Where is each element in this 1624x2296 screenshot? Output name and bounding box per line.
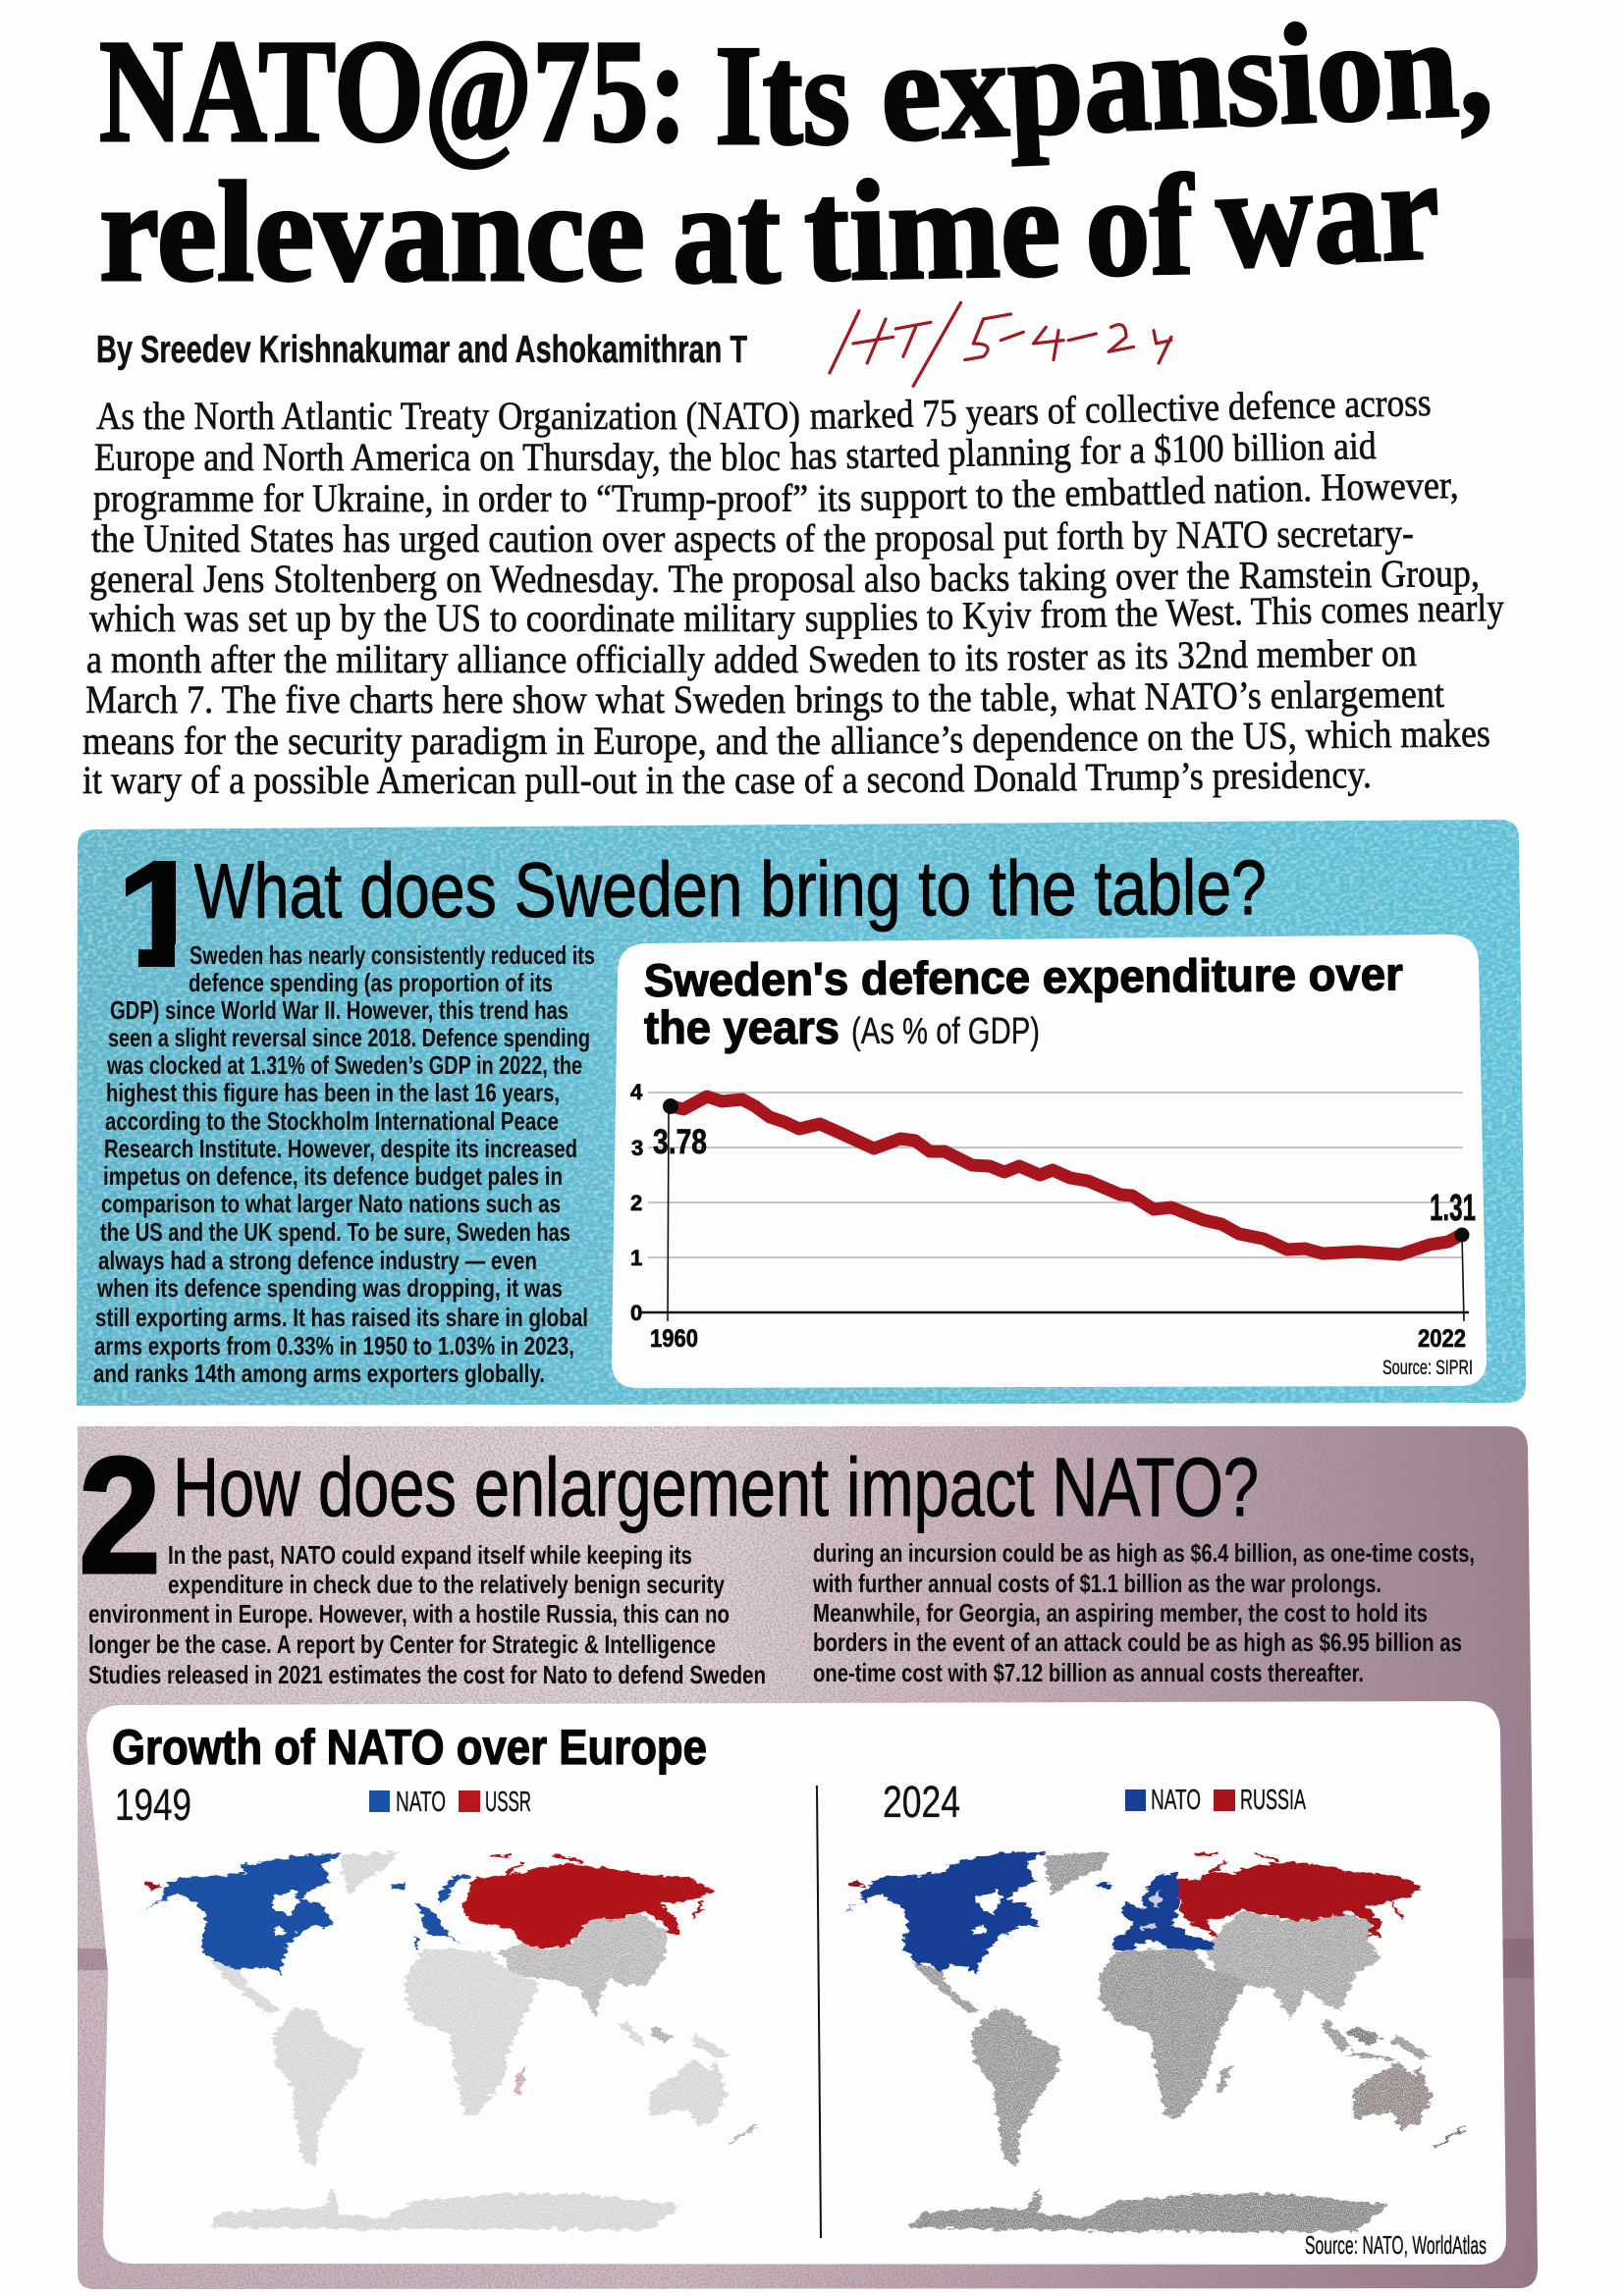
body text: impetus on defence, its defence budget pales in bbox=[103, 1161, 563, 1191]
title: time bbox=[803, 147, 1062, 311]
body text: left column bbox=[88, 1540, 766, 1689]
body text: was clocked at 1.31% of Sweden’s GDP in 2022, the bbox=[106, 1050, 582, 1080]
body text: left column: environment in Europe. However, with a hostile Russia, this can no bbox=[88, 1599, 730, 1629]
world map 2024 bbox=[840, 1851, 1466, 2232]
chart card: Sweden's defence expenditure bbox=[612, 934, 1487, 1388]
chart title: the years bbox=[644, 1001, 839, 1053]
title bbox=[99, 0, 1495, 313]
title: relevance bbox=[99, 152, 645, 311]
intro text block: Sweden to its roster as its 32nd member on bbox=[808, 630, 1417, 681]
body text: and ranks 14th among arms exporters globally. bbox=[93, 1359, 545, 1388]
intro text block: which was set up by the US to coordinate military bbox=[89, 596, 795, 640]
body text: right column: one-time cost with $7.12 billion as annual costs thereafter. bbox=[813, 1658, 1364, 1687]
title: Its bbox=[715, 16, 850, 175]
line chart: 3.78 bbox=[653, 1123, 707, 1161]
body text: highest this figure has been in the last 16 years, bbox=[106, 1078, 560, 1107]
intro text block: Europe and North America on Thursday, the bloc bbox=[94, 435, 781, 479]
chart title: Sweden's defence expenditure over bbox=[644, 947, 1403, 1006]
legend 1949 bbox=[369, 1787, 531, 1818]
body text: comparison to what larger Nato nations such as bbox=[101, 1189, 561, 1218]
legend 2024 bbox=[1125, 1785, 1306, 1816]
intro text block: marked 75 years of collective defence across bbox=[809, 380, 1432, 438]
body text: left column: expenditure in check due to the relatively benign security bbox=[168, 1570, 725, 1599]
chart source: Source: SIPRI bbox=[1382, 1357, 1473, 1379]
legend 1949: NATO bbox=[396, 1787, 446, 1818]
intro text block: its support to the embattled nation. However, bbox=[817, 462, 1459, 520]
body text: the US and the UK spend. To be sure, Sweden has bbox=[100, 1217, 570, 1247]
body text bbox=[93, 940, 595, 1388]
line chart: 3 bbox=[631, 1136, 643, 1160]
body text: always had a strong defence industry — even bbox=[98, 1246, 537, 1275]
intro text block: the United States has urged caution over aspects of bbox=[91, 516, 816, 561]
intro text block: alliance’s dependence on the US, which makes bbox=[831, 711, 1490, 763]
year label 2024: 2024 bbox=[883, 1777, 960, 1827]
line chart: 0 bbox=[630, 1301, 642, 1325]
body text: left column: In the past, NATO could expand itself while keeping its bbox=[168, 1540, 692, 1570]
map card title: Growth of NATO over Europe bbox=[112, 1720, 707, 1775]
intro text block: has started planning for a $100 billion aid bbox=[789, 423, 1377, 478]
body text: left column: longer be the case. A report by Center for Strategic & Intelligence bbox=[88, 1629, 716, 1659]
map 1949 bbox=[115, 1780, 760, 2229]
line chart: 2022 bbox=[1418, 1325, 1466, 1353]
intro text block bbox=[82, 380, 1504, 802]
body text: arms exports from 0.33% in 1950 to 1.03% in 2023, bbox=[94, 1331, 574, 1361]
title: war bbox=[1213, 130, 1442, 298]
divider between maps bbox=[817, 1786, 821, 2238]
intro text block: also backs taking over the Ramstein Group, bbox=[864, 551, 1480, 601]
map 2024 bbox=[840, 1777, 1466, 2232]
year label 1949: 1949 bbox=[115, 1780, 191, 1830]
chart title: (As % of GDP) bbox=[851, 1011, 1040, 1052]
body text: left column: Studies released in 2021 estimates the cost for Nato to defend Sweden bbox=[88, 1660, 766, 1689]
intro text block: general Jens Stoltenberg on Wednesday. The proposal bbox=[89, 557, 855, 601]
chart title bbox=[644, 947, 1403, 1053]
body text: defence spending (as proportion of its bbox=[189, 968, 553, 997]
body text: right column: with further annual costs of $1.1 billion as the war prolongs. bbox=[812, 1569, 1381, 1598]
legend 2024: RUSSIA bbox=[1240, 1785, 1306, 1816]
body text: right column: borders in the event of an attack could be as high as $6.95 billion as bbox=[813, 1628, 1462, 1657]
title: NATO@75: bbox=[99, 10, 687, 173]
intro text block: March 7. The five charts here show what Sweden bbox=[85, 677, 785, 721]
section heading: How does enlargement impact NATO? bbox=[173, 1441, 1259, 1533]
intro text block: programme for Ukraine, in order to “Trump-proof” bbox=[93, 476, 808, 520]
section heading: What does Sweden bring to the table? bbox=[194, 843, 1267, 934]
body text: right column bbox=[812, 1538, 1475, 1687]
intro text block: the proposal put forth by NATO secretary- bbox=[824, 510, 1414, 561]
panel: how does enlargement impact NATO bbox=[69, 1414, 1551, 2296]
line chart: 1.31 bbox=[1430, 1188, 1476, 1229]
world map 1949 bbox=[139, 1851, 760, 2229]
intro text block: As the North Atlantic Treaty Organization (NATO) bbox=[96, 394, 800, 438]
map card: growth of NATO over Europe bbox=[86, 1701, 1506, 2265]
line chart bbox=[630, 1080, 1476, 1353]
intro text block: of a second Donald Trump’s presidency. bbox=[804, 752, 1372, 802]
title: of bbox=[1084, 145, 1197, 306]
legend 2024: NATO bbox=[1151, 1785, 1201, 1816]
handwritten note: HT/5-4-24 bbox=[830, 302, 1171, 386]
line chart: 1960 bbox=[650, 1325, 698, 1353]
map source: Source: NATO, WorldAtlas bbox=[1305, 2230, 1487, 2260]
title: at bbox=[673, 154, 781, 313]
body text: Sweden has nearly consistently reduced its bbox=[189, 940, 595, 970]
intro text block: a month after the military alliance officially added bbox=[86, 637, 798, 681]
line chart: 4 bbox=[630, 1080, 643, 1104]
line chart: 1 bbox=[630, 1246, 642, 1270]
body text: right column: Meanwhile, for Georgia, an aspiring member, the cost to hold its bbox=[813, 1598, 1428, 1628]
body text: GDP) since World War II. However, this trend has bbox=[110, 995, 568, 1025]
intro text block: it wary of a possible American pull-out in the case bbox=[82, 758, 795, 802]
intro text block: brings to the table, what NATO’s enlargement bbox=[795, 671, 1444, 721]
section number 1: 1 bbox=[116, 829, 204, 998]
legend 1949: USSR bbox=[485, 1787, 531, 1818]
byline: By Sreedev Krishnakumar and Ashokamithran T bbox=[96, 329, 747, 371]
section number 2: 2 bbox=[79, 1422, 161, 1608]
panel: what does Sweden bring to the table bbox=[69, 815, 1542, 1414]
body text: still exporting arms. It has raised its share in global bbox=[95, 1303, 588, 1332]
body text: when its defence spending was dropping, it was bbox=[96, 1273, 563, 1303]
body text: Research Institute. However, despite its increased bbox=[104, 1134, 577, 1163]
body text: according to the Stockholm International Peace bbox=[105, 1106, 559, 1136]
intro text block: supplies to Kyiv from the West. This comes nearly bbox=[804, 585, 1504, 640]
line chart: 2 bbox=[630, 1191, 642, 1215]
body text: seen a slight reversal since 2018. Defence spending bbox=[108, 1023, 590, 1052]
intro text block: means for the security paradigm in Europe, and the bbox=[82, 719, 821, 763]
